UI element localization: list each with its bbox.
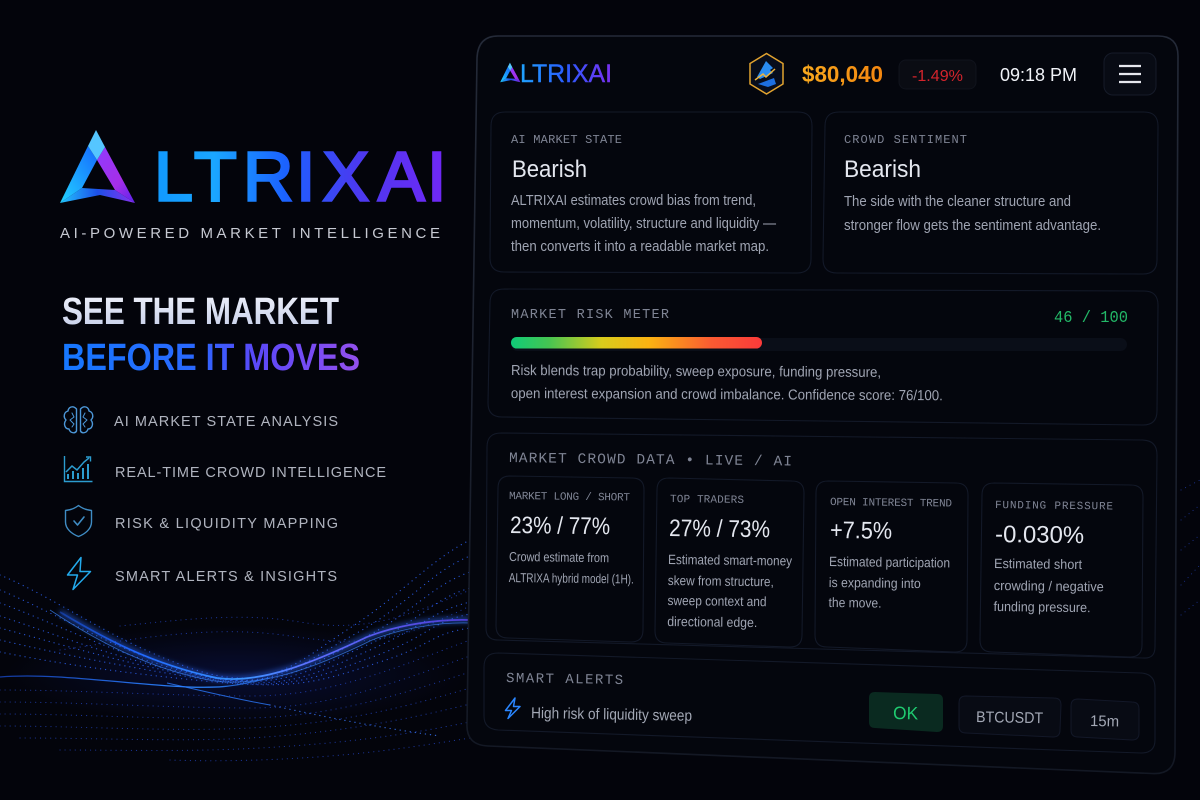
card: open interest trend: OPEN INTEREST TREND xyxy=(830,497,952,510)
headline: SEE THE MARKET xyxy=(62,291,339,333)
particle wave xyxy=(0,480,1200,761)
description: then converts it into a readable market map. xyxy=(511,239,769,255)
panel: crowd sentiment: Bearish xyxy=(844,156,921,183)
icon: alert bolt xyxy=(506,698,520,718)
feature: real-time crowd intelligence xyxy=(64,456,386,482)
card: open interest trend: +7.5% xyxy=(830,517,892,545)
chip: timeframe xyxy=(1071,699,1139,740)
panel: dashboard xyxy=(467,36,1178,774)
icon: shield xyxy=(66,506,92,536)
feature: risk and liquidity mapping: RISK & LIQUIDITY MAPPING xyxy=(115,516,338,532)
headline xyxy=(62,291,360,379)
panel: market crowd data: MARKET CROWD DATA • LIVE / AI xyxy=(509,451,792,470)
panel: crowd sentiment: CROWD SENTIMENT xyxy=(844,133,967,147)
feature: risk and liquidity mapping xyxy=(66,506,338,536)
feature: AI market state analysis: AI MARKET STATE ANALYSIS xyxy=(114,414,338,430)
change chip xyxy=(899,60,976,89)
wordmark: LTRIXAI xyxy=(154,138,446,216)
panel: market risk meter xyxy=(488,289,1158,425)
card: top traders: sweep context and xyxy=(667,593,767,609)
panel: market crowd data xyxy=(486,433,1157,658)
chip: symbol: BTCUSDT xyxy=(976,709,1044,727)
card: open interest trend xyxy=(815,481,968,652)
card: top traders: skew from structure, xyxy=(668,573,774,589)
risk bar xyxy=(511,337,1127,351)
description: The side with the cleaner structure and xyxy=(844,194,1071,210)
logo: large xyxy=(60,130,446,216)
price: $80,040 xyxy=(802,61,883,87)
card: market long short: 23% / 77% xyxy=(510,512,610,540)
card: funding pressure: Estimated short xyxy=(994,556,1082,572)
chip: timeframe: 15m xyxy=(1090,713,1119,731)
icon: lightning bolt xyxy=(68,558,90,590)
logo: small: LTRIXAI xyxy=(520,60,612,88)
panel: AI market state: Bearish xyxy=(512,156,587,183)
description: stronger flow gets the sentiment advantage. xyxy=(844,218,1101,234)
status chip: OK xyxy=(869,692,943,732)
card: market long short: MARKET LONG / SHORT xyxy=(509,491,630,504)
feature: AI market state analysis xyxy=(64,407,338,433)
description: open interest expansion and crowd imbalance. Confidence score: 76/100. xyxy=(511,386,943,404)
card: top traders xyxy=(655,478,804,647)
icon: logo A mark xyxy=(60,130,135,203)
card: open interest trend: the move. xyxy=(828,595,882,611)
card: funding pressure: crowding / negative xyxy=(994,578,1104,594)
feature: real-time crowd intelligence: REAL-TIME CROWD INTELLIGENCE xyxy=(115,465,386,481)
card: funding pressure: -0.030% xyxy=(995,521,1084,549)
description xyxy=(511,193,776,255)
description: ALTRIXAI estimates crowd bias from trend, xyxy=(511,193,756,209)
icon: chart xyxy=(64,456,92,482)
clock: 09:18 PM xyxy=(1000,65,1077,85)
headline: BEFORE IT MOVES xyxy=(62,337,360,379)
card: funding pressure: funding pressure. xyxy=(993,599,1091,615)
icon: brain xyxy=(64,407,93,433)
alert text: High risk of liquidity sweep xyxy=(531,705,692,725)
header bar xyxy=(500,53,1156,95)
description xyxy=(844,194,1101,234)
card: top traders: 27% / 73% xyxy=(669,515,770,543)
description: momentum, volatility, structure and liquidity — xyxy=(511,216,776,232)
icon: hexagon badge xyxy=(750,54,783,94)
change chip: -1.49% xyxy=(912,68,963,85)
chip: symbol xyxy=(959,696,1061,737)
card: open interest trend: is expanding into xyxy=(829,575,921,591)
card: market long short xyxy=(496,476,644,642)
feature list xyxy=(64,407,386,590)
panel: market risk meter: MARKET RISK METER xyxy=(511,308,669,323)
card: funding pressure xyxy=(980,483,1143,657)
card: top traders: directional edge. xyxy=(667,614,757,630)
description: Risk blends trap probability, sweep exposure, funding pressure, xyxy=(511,363,881,381)
card: top traders: TOP TRADERS xyxy=(670,494,744,507)
description xyxy=(511,363,943,404)
panel: AI market state: AI MARKET STATE xyxy=(511,133,622,147)
card: funding pressure: FUNDING PRESSURE xyxy=(995,500,1113,513)
menu button xyxy=(1104,53,1156,95)
tagline: AI-POWERED MARKET INTELLIGENCE xyxy=(60,225,440,242)
card: market long short: Crowd estimate from xyxy=(509,549,609,565)
panel: smart alerts: SMART ALERTS xyxy=(506,671,623,689)
panel: smart alerts xyxy=(484,653,1155,753)
panel: crowd sentiment xyxy=(823,112,1158,274)
panel: AI market state xyxy=(490,112,812,273)
status chip: OK: OK xyxy=(893,703,918,723)
card: market long short: ALTRIXA hybrid model (1H). xyxy=(509,570,634,587)
feature: smart alerts and insights xyxy=(68,558,337,590)
card: open interest trend: Estimated participation xyxy=(829,554,950,570)
card: top traders: Estimated smart-money xyxy=(668,552,792,569)
feature: smart alerts and insights: SMART ALERTS & INSIGHTS xyxy=(115,569,337,585)
score: 46 / 100 xyxy=(1054,309,1128,328)
